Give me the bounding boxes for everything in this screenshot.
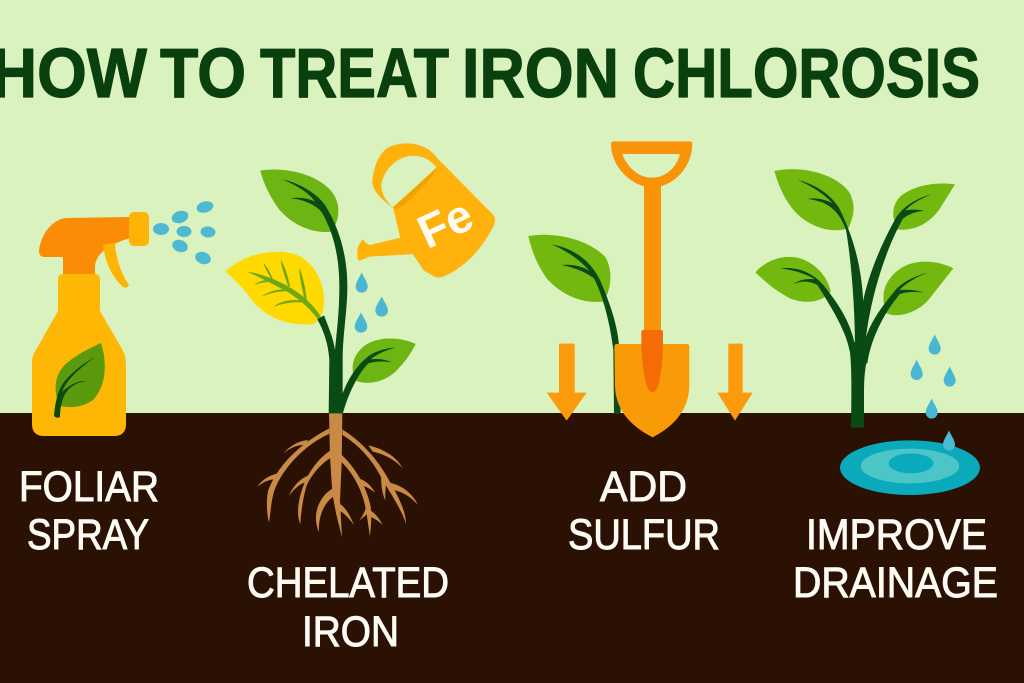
label: chelated iron: IRON	[302, 608, 399, 656]
spray droplets	[153, 199, 216, 266]
D grip	[611, 141, 692, 187]
top leaf	[260, 170, 338, 232]
sky background	[0, 0, 1024, 413]
stem and veins	[552, 244, 621, 414]
right arrow	[717, 344, 753, 421]
leaf	[528, 235, 610, 302]
puddle	[840, 430, 980, 495]
shovel socket	[641, 330, 663, 392]
Fe label: Fe	[410, 188, 481, 258]
stems	[781, 180, 932, 428]
icon: shovel with plant	[528, 141, 753, 437]
icon: foliar spray bottle	[32, 212, 149, 436]
label: chelated iron	[247, 559, 449, 656]
icon: drainage plant	[755, 169, 980, 495]
nozzle	[129, 212, 149, 246]
icon: chelated iron plant	[225, 143, 495, 414]
lower right leaf	[353, 339, 416, 383]
title: TREAT	[260, 34, 449, 112]
soil band	[0, 413, 1024, 683]
bottle leaf stem	[54, 357, 95, 418]
yellow leaf veins	[247, 259, 322, 320]
label: add sulfur	[568, 463, 720, 559]
label: foliar spray: SPRAY	[27, 511, 149, 559]
icon: roots	[257, 413, 418, 537]
title: IRON	[462, 34, 619, 112]
yellow chlorotic leaf	[225, 252, 324, 324]
handle shadow stripe	[393, 167, 437, 209]
left arrow	[547, 344, 587, 421]
plant stem and veins	[283, 179, 396, 414]
label: improve drainage: DRAINAGE	[793, 559, 998, 607]
falling drops	[911, 334, 956, 419]
label: foliar spray: FOLIAR	[19, 463, 159, 511]
label: improve drainage	[793, 511, 998, 607]
leaves	[755, 169, 955, 315]
bottle body	[32, 274, 126, 436]
can handle and body	[372, 143, 495, 278]
spray head	[39, 217, 130, 275]
label: foliar spray	[19, 463, 159, 559]
label: add sulfur: SULFUR	[568, 511, 720, 559]
title: TO	[160, 34, 246, 112]
bottle leaf	[56, 343, 105, 407]
can spout	[357, 237, 415, 261]
water drops	[355, 272, 388, 333]
shovel handle	[644, 185, 661, 333]
watering can	[357, 143, 495, 278]
label: add sulfur: ADD	[600, 463, 687, 511]
label: chelated iron: CHELATED	[247, 559, 449, 607]
trigger	[103, 243, 129, 288]
shovel blade	[614, 344, 689, 437]
title	[0, 34, 980, 112]
label: improve drainage: IMPROVE	[806, 511, 987, 559]
